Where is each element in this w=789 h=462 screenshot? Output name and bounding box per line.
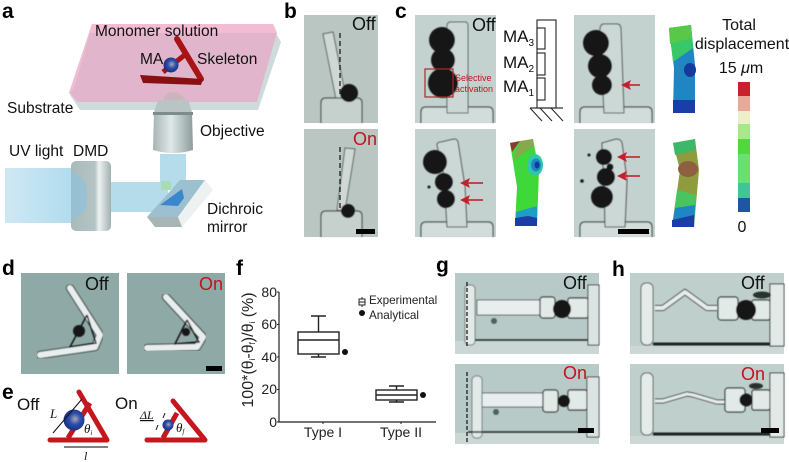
MA schematic: MA [503,53,528,72]
micrograph g on: On [563,363,587,383]
label d: d [2,257,15,280]
micrograph b on [304,129,378,237]
legend: Analytical [369,309,419,322]
panel d: triangle actuator micrographs [2,257,225,374]
colour bar labels [695,17,789,236]
skeleton [140,39,203,85]
legend [359,294,437,322]
micrograph b off [304,14,378,123]
axes: 20 [261,381,277,397]
off geometry: Off [17,395,40,414]
off geometry: L [49,406,57,421]
labels for setup: Skeleton [197,51,257,68]
axes: f [248,341,257,344]
micrograph h on [630,364,784,444]
micrograph d on: On [199,274,223,294]
micrograph c off [415,15,497,123]
micrograph h off: Off [741,273,766,293]
UV beam [5,154,186,223]
micrograph d off: Off [85,274,110,294]
micrograph c MA1 and MA2 active [415,129,496,237]
micrograph d on [127,273,225,374]
labels for setup: UV light [9,143,64,160]
label e: e [2,381,14,404]
micrograph d off [21,273,119,374]
axes: 100*(θ [240,360,257,408]
colour bar labels: 0 [738,219,747,236]
DMD [71,161,111,231]
panel c: selective activation [395,0,789,237]
objective [153,92,193,153]
labels for setup: Monomer solution [95,23,218,40]
axes: (%) [240,292,257,322]
dichroic mirror [147,180,213,227]
label a: a [2,0,14,23]
colour bar labels: 15 μm [719,60,763,77]
off geometry: θ [84,421,90,436]
label c: c [395,0,407,23]
panel b: single actuator micrographs [284,0,378,237]
axes: 60 [261,316,277,332]
axes [240,284,436,440]
on geometry: On [115,394,138,413]
labels for setup: mirror [207,219,247,236]
panel g: linear mechanism micrographs [436,254,599,444]
box type I [298,316,348,357]
FEA strip MA1 [669,25,696,113]
micrograph c off: Off [472,15,497,35]
axes: -θ [240,344,257,359]
micrograph c MA1 active [574,15,655,123]
axes: 40 [261,349,277,365]
panel e: geometry diagram [2,381,205,462]
micrograph c off: Selective [455,73,492,83]
FEA strip MA2 and MA3 [672,139,699,227]
micrograph b on: On [353,129,377,149]
micrograph g on [455,363,599,444]
micrograph h off [630,273,784,354]
label h: h [612,258,625,281]
label b: b [284,0,297,23]
MA schematic: MA [503,27,528,46]
off geometry [17,392,108,462]
MA schematic: 1 [528,88,534,99]
label f: f [236,257,244,280]
FEA strip MA1 and MA2 [510,139,543,226]
substrate [70,30,281,110]
labels for setup: DMD [73,143,108,160]
axes: 80 [261,284,277,300]
MA schematic: MA [503,77,528,96]
colour bar labels: Total [722,17,756,34]
box type II [376,386,426,402]
panel f: box plot [236,257,437,440]
legend: Experimental [369,294,437,307]
micrograph g off [455,273,599,354]
MA sphere [164,58,178,72]
MA schematic: 2 [528,64,534,75]
on geometry [115,394,205,440]
panel a: setup schematic [2,0,281,236]
micrograph b off: Off [352,14,377,34]
on geometry: f [182,428,185,436]
MA schematic [503,20,563,121]
axes: )/θ [240,323,257,342]
labels for setup: Dichroic [207,201,263,218]
colour bar [738,82,750,212]
micrograph c off: activation [455,84,493,94]
axes: i [248,358,257,360]
axes: Type I [304,424,342,440]
axes: Type II [380,424,422,440]
labels for setup: Objective [200,123,265,140]
micrograph g off: Off [563,273,588,293]
labels for setup: Substrate [7,100,73,117]
panel h: folding mechanism micrographs [612,258,784,444]
axes: i [248,322,257,324]
micrograph h on: On [741,364,765,384]
on geometry: ΔL [139,408,154,422]
colour bar labels: displacement [695,36,789,53]
label g: g [436,254,449,277]
labels for setup [7,23,265,236]
axes: 0 [269,414,277,430]
monomer solution layer [69,24,277,102]
on geometry: θ [176,420,182,435]
labels for setup: MA [140,51,164,68]
off geometry: i [90,429,92,437]
MA schematic: 3 [528,38,534,49]
micrograph c MA2 and MA3 active [574,129,655,237]
